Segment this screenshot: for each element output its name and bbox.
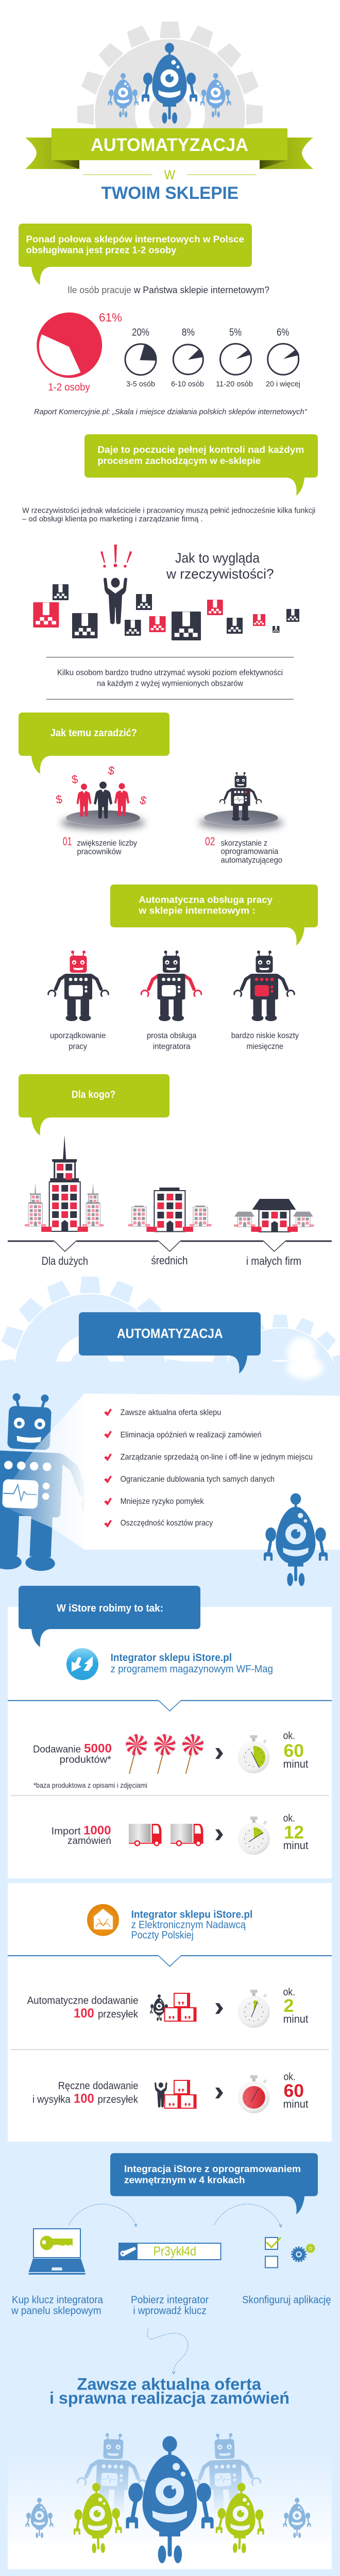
stopwatch: 12 minutes	[238, 1813, 309, 1855]
panel: robot team	[8, 2421, 332, 2569]
note between rules: na każdym z wyżej wymienionych obszarów	[97, 680, 243, 688]
callout: automatic handling: Automatyczna obsługa pracy	[139, 894, 273, 905]
pie: 20%	[125, 327, 157, 388]
step 1: laptop with key: w panelu sklepowym	[11, 2306, 101, 2317]
option 01: more employees: $	[107, 764, 115, 777]
stopwatch: 12 minutes: ok.	[283, 1813, 295, 1824]
step 2: licence key field: Pr3ykł4d	[154, 2244, 196, 2259]
paragraph	[22, 506, 315, 523]
option 02: automation software	[199, 772, 283, 865]
callout: automation: AUTOMATYZACJA	[117, 1326, 223, 1341]
stopwatch: 60 minutes: minut	[283, 1758, 309, 1770]
title ribbon	[25, 128, 313, 169]
stopwatch: 60 minutes: ok.	[283, 1731, 295, 1742]
step 2: licence key field: Pobierz integrator	[131, 2295, 209, 2306]
stopwatch: 2 minutes: 2	[283, 1996, 294, 2016]
pie: 20%: 20%	[132, 327, 149, 338]
pie: 20%: 3-5 osób	[126, 380, 155, 388]
title ribbon: AUTOMATYZACJA	[91, 135, 248, 155]
company size axis: i małych firm	[246, 1255, 301, 1267]
callout: automation	[79, 1312, 261, 1374]
step 2: licence key field: i wprowadź klucz	[133, 2306, 207, 2317]
pie: 6%: 6%	[277, 327, 290, 338]
stopwatch: 12 minutes: 12	[284, 1822, 304, 1842]
small companies	[234, 1199, 314, 1232]
callout: iStore: W iStore robimy to tak:	[57, 1603, 163, 1614]
benefit: low costs	[231, 951, 299, 1051]
stopwatch: 60 minutes manual	[238, 2072, 309, 2113]
paragraph: W rzeczywistości jednak właściciele i pracownicy muszą pełnić jednocześnie kilka funkcji	[22, 506, 315, 515]
row: import 1000 orders	[52, 1824, 223, 1846]
conclusion: i sprawna realizacja zamówień	[49, 2389, 290, 2408]
icon: envelope	[87, 1904, 119, 1936]
heading: WF-Mag	[111, 1652, 273, 1675]
option 01: more employees: 01	[63, 835, 72, 848]
heading: WF-Mag: z programem magazynowym WF-Mag	[111, 1664, 273, 1675]
step 3: configuration	[242, 2238, 331, 2306]
panel: benefits list: Eliminacja opóźnień w realizacji zamówień	[121, 1431, 262, 1439]
large companies	[25, 1135, 104, 1232]
row: automatic adding: Automatyczne dodawanie	[27, 1995, 138, 2006]
header gear	[77, 22, 263, 128]
icon: overwhelmed man	[104, 578, 127, 624]
callout: for whom: Dla kogo?	[72, 1089, 115, 1100]
row: import 1000 orders: Import	[52, 1826, 81, 1837]
option 02: automation software: skorzystanie z	[220, 839, 267, 848]
arrows between steps	[69, 2204, 282, 2374]
note between rules: Kilku osobom bardzo trudno utrzymać wysoki poziom efektywności	[57, 669, 283, 677]
option 02: automation software: 02	[205, 835, 215, 848]
stopwatch: 60 minutes manual: 60	[283, 2081, 304, 2101]
pie: 5%	[216, 327, 253, 388]
pie: 61%: 1-2 osoby	[48, 382, 90, 393]
pie: 61%: 61%	[99, 311, 122, 324]
benefit: low costs: miesięczne	[246, 1042, 283, 1051]
heading: Poczta Polska: Integrator sklepu iStore.pl	[131, 1909, 252, 1921]
callout: automatic handling: w sklepie internetowym :	[138, 905, 256, 916]
callout: automatic handling	[110, 885, 318, 945]
company size axis	[8, 1241, 332, 1267]
step 1: laptop with key: Kup klucz integratora	[12, 2295, 104, 2306]
stopwatch: 60 minutes	[237, 1731, 309, 1773]
callout: for whom	[19, 1074, 169, 1136]
conclusion	[49, 2375, 290, 2408]
option 01: more employees: $	[55, 792, 63, 806]
option 02: automation software: automatyzującego	[220, 856, 282, 865]
option 01: more employees: zwiększenie liczby	[77, 839, 137, 848]
question: Ile osób pracuje w Państwa sklepie internetowym?	[67, 285, 269, 295]
row: manual adding: przesyłek	[98, 2094, 139, 2106]
panel: benefits list: Oszczędność kosztów pracy	[121, 1519, 213, 1528]
callout: staff share: obsługiwana jest przez 1-2 osoby	[26, 245, 176, 256]
callout: integration steps	[110, 2153, 318, 2214]
row: manual adding	[32, 2080, 223, 2109]
stopwatch: 60 minutes manual: minut	[283, 2098, 309, 2110]
row: manual adding: Ręczne dodawanie	[58, 2080, 138, 2092]
note between rules	[46, 657, 294, 699]
pie: 6%: 20 i więcej	[266, 380, 300, 388]
company size axis: średnich	[151, 1254, 188, 1267]
heading: Poczta Polska	[131, 1909, 252, 1941]
option 01: more employees: pracowników	[77, 848, 122, 856]
stopwatch: 2 minutes: ok.	[283, 1987, 295, 1998]
row: automatic adding	[27, 1993, 223, 2022]
callout: staff share: Ponad połowa sklepów internetowych w Polsce	[26, 234, 244, 245]
panel: iStore and Poczta Polska	[8, 1883, 332, 2142]
heading: reality: w rzeczywistości?	[166, 566, 274, 582]
callout: integration steps: Integracja iStore z oprogramowaniem	[124, 2164, 301, 2174]
pie: 8%: 6-10 osób	[171, 380, 204, 388]
callout: how to fix: Jak temu zaradzić?	[50, 727, 137, 739]
heading: Poczta Polska: z Elektronicznym Nadawcą	[131, 1920, 246, 1931]
panel: iStore and WF-Mag	[8, 1607, 332, 1878]
large robot with projection beam	[0, 1391, 107, 1573]
benefit: simple: prosta obsługa	[147, 1031, 196, 1040]
callout: integration steps: zewnętrznym w 4 krokach	[124, 2175, 245, 2185]
option 01: more employees	[55, 764, 148, 856]
callout: control: Daje to poczucie pełnej kontroli nad każdym	[97, 445, 304, 455]
option 01: more employees: $	[71, 772, 78, 786]
panel: benefits list: Mniejsze ryzyko pomyłek	[121, 1497, 205, 1506]
option 02: automation software: oprogramowania	[220, 848, 278, 856]
small robot	[264, 1493, 328, 1586]
benefit: low costs: bardzo niskie koszty	[231, 1031, 299, 1040]
row: add 5000 products: 5000	[84, 1742, 112, 1756]
title subtitle: W	[164, 167, 175, 182]
pie: 8%: 8%	[182, 327, 195, 338]
benefit: simple	[141, 951, 201, 1051]
row: manual adding: i wysyłka	[32, 2094, 71, 2106]
icon: sync arrows	[66, 1648, 98, 1680]
option 01: more employees: $	[139, 793, 148, 807]
heading: reality: Jak to wygląda	[175, 550, 260, 566]
company size axis: Dla dużych	[42, 1255, 88, 1267]
heading: reality	[166, 550, 274, 582]
step 2: licence key field	[118, 2243, 220, 2317]
robot team	[26, 2432, 311, 2563]
stopwatch: 2 minutes: minut	[283, 2013, 309, 2025]
icon: pile of parcels	[33, 584, 299, 640]
callout: iStore	[19, 1586, 200, 1647]
conclusion: Zawsze aktualna oferta	[77, 2375, 261, 2393]
row: manual adding: 100	[74, 2092, 94, 2106]
benefit: order	[48, 951, 109, 1051]
medium companies	[128, 1188, 211, 1232]
icon: exclamation marks	[100, 545, 132, 568]
pie: 5%: 11-20 osób	[216, 380, 253, 388]
heading: Poczta Polska: Poczty Polskiej	[131, 1930, 194, 1941]
benefit: order: pracy	[69, 1042, 87, 1051]
row: add 5000 products: produktów*	[60, 1755, 112, 1766]
row: import 1000 orders: zamówień	[67, 1836, 111, 1846]
row: add 5000 products: Dodawanie	[33, 1744, 81, 1755]
source note: Raport Komercyjnie.pl: „Skala i miejsce działania polskich sklepów internetowych”	[34, 408, 307, 416]
benefit: simple: integratora	[153, 1042, 191, 1051]
light blue background with gears	[0, 1277, 340, 2576]
row: automatic adding: przesyłek	[98, 2009, 139, 2020]
callout: control	[84, 434, 318, 496]
stopwatch: 60 minutes: 60	[283, 1741, 304, 1761]
row: automatic adding: 100	[74, 2006, 94, 2021]
row: import 1000 orders: 1000	[83, 1824, 111, 1838]
panel: benefits list: Zawsze aktualna oferta sklepu	[121, 1409, 221, 1417]
panel: benefits list: Ograniczanie dublowania tych samych danych	[121, 1475, 275, 1484]
stopwatch: 12 minutes: minut	[283, 1840, 309, 1852]
stopwatch: 60 minutes manual: ok.	[283, 2072, 296, 2083]
step 1: laptop with key	[11, 2229, 104, 2317]
paragraph: – od obsługi klienta po marketing i zarządzanie firmą .	[22, 515, 203, 523]
pie: 8%	[171, 327, 204, 388]
callout: control: procesem zachodzącym w e-sklepie	[97, 456, 261, 466]
footnote: *baza produktowa z opisami i zdjęciami	[33, 1782, 147, 1789]
header robots	[108, 43, 231, 124]
panel: benefits list: Zarządzanie sprzedażą on-line i off-line w jednym miejscu	[121, 1453, 313, 1462]
row: add 5000 products	[33, 1734, 223, 1774]
title subtitle	[83, 167, 256, 203]
pie: 61%	[37, 311, 122, 393]
callout: staff share	[19, 224, 252, 285]
stopwatch: 2 minutes	[238, 1987, 309, 2028]
step 3: configuration: Skonfiguruj aplikację	[242, 2295, 331, 2306]
panel: benefits list	[84, 1394, 340, 1550]
title subtitle: TWOIM SKLEPIE	[101, 183, 239, 203]
heading: WF-Mag: Integrator sklepu iStore.pl	[111, 1652, 232, 1664]
callout: how to fix	[19, 713, 169, 774]
benefit: order: uporządkowanie	[50, 1031, 106, 1040]
pie: 5%: 5%	[229, 327, 242, 338]
pie: 6%	[266, 327, 300, 388]
